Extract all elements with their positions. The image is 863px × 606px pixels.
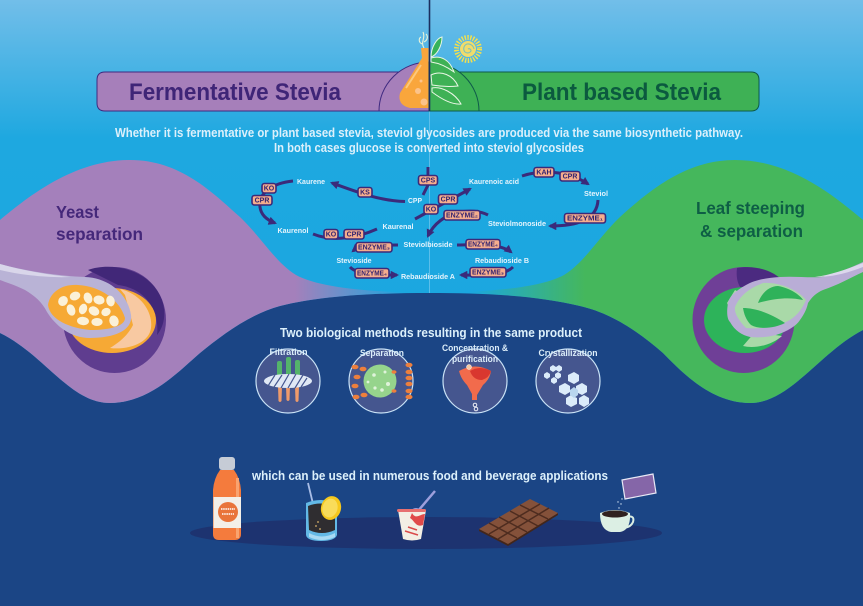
compound labels: CPP xyxy=(408,196,422,205)
intro text xyxy=(115,126,743,155)
intro text: In both cases glucose is converted into steviol glycosides xyxy=(274,141,584,155)
enzyme badges: ENZYME₃ xyxy=(358,244,390,252)
icon: yogurt xyxy=(397,491,435,540)
enzyme badges: ENZYME₄ xyxy=(468,242,498,248)
enzyme badges: KO xyxy=(426,206,437,214)
icon: separation: Separation xyxy=(360,348,404,359)
icon: leaf bowl and spoon xyxy=(692,262,863,373)
enzyme badges: KS xyxy=(360,190,370,196)
yeast cells xyxy=(56,290,120,328)
enzyme badges: CPR xyxy=(347,232,361,238)
icon: concentration funnel xyxy=(442,343,508,413)
intro text: Whether it is fermentative or plant based stevia, steviol glycosides are produced via the same biosynthetic pathway. xyxy=(115,126,743,140)
enzyme badges: ENZYME₂ xyxy=(446,212,478,220)
icon: flask xyxy=(399,32,428,108)
text: applications: which can be used in numerous food and beverage applications xyxy=(251,469,608,483)
icon: crystallization xyxy=(536,348,600,413)
compound labels: Kaurenal xyxy=(382,222,414,231)
compound labels: Steviolbioside xyxy=(404,240,452,249)
heading: two biological methods: Two biological methods resulting in the same product xyxy=(280,326,583,340)
icon: plant xyxy=(431,37,461,104)
enzyme badges: KAH xyxy=(536,170,552,176)
enzyme badges: CPR xyxy=(563,174,577,180)
enzyme badges: KO xyxy=(326,232,337,238)
enzyme badges: CPR xyxy=(441,196,455,204)
compound labels: Steviol xyxy=(584,189,608,198)
icon: crystallization: Crystallization xyxy=(538,348,598,359)
compound labels: Rebaudioside B xyxy=(475,256,530,265)
icon: sun xyxy=(456,38,480,60)
central emblem dome xyxy=(379,62,479,111)
icon: filtration: Filtration xyxy=(270,347,308,358)
heading: Yeast separation: separation xyxy=(56,224,143,244)
background: navy lower area xyxy=(0,293,863,606)
icon: concentration funnel: purification xyxy=(452,354,498,365)
enzyme badges: ENZYME₄ xyxy=(357,270,387,278)
icon: drink glass xyxy=(306,483,344,541)
enzyme badges: ENZYME₃ xyxy=(472,270,504,276)
leaves in spoon xyxy=(743,286,803,328)
icon: coffee cup and sachet xyxy=(600,474,656,532)
heading: Leaf steeping and separation: Leaf steeping xyxy=(696,198,805,218)
heading: Yeast separation: Yeast xyxy=(56,202,99,222)
icon: yeast bowl and spoon xyxy=(0,264,166,373)
enzyme badges: CPR xyxy=(255,198,269,204)
shadow ellipse xyxy=(190,517,662,549)
enzyme badges: CPS xyxy=(421,178,436,184)
enzyme badges: ENZYME₁ xyxy=(567,216,603,222)
pathway arrows xyxy=(260,167,598,275)
pathway diagram xyxy=(252,167,608,281)
icon: chocolate bar xyxy=(479,499,558,546)
compound labels: Kaurenoic acid xyxy=(469,177,519,186)
heading: Fermentative Stevia: Fermentative Stevia xyxy=(129,79,342,106)
heading: Yeast separation xyxy=(56,202,143,244)
compound labels: Steviolmonoside xyxy=(488,219,546,228)
compound labels: Kaurene xyxy=(297,177,325,186)
enzyme badges xyxy=(252,168,606,278)
icon: separation xyxy=(349,348,413,413)
header bar: Fermentative Stevia xyxy=(97,72,429,111)
panel: green plant based region xyxy=(430,160,863,403)
heading: Leaf steeping and separation: & separation xyxy=(700,221,803,241)
heading: Plant based Stevia: Plant based Stevia xyxy=(522,79,722,106)
icon: filtration xyxy=(256,347,320,413)
background: sky xyxy=(0,0,863,420)
compound labels: Kaurenol xyxy=(278,226,308,235)
icon: concentration funnel: Concentration & xyxy=(442,343,508,354)
icon: bottle xyxy=(213,457,241,540)
compound labels: Rebaudioside A xyxy=(401,272,456,281)
enzyme badges: KO xyxy=(264,186,275,192)
header bar: Plant based Stevia xyxy=(429,72,759,111)
heading: Leaf steeping and separation xyxy=(696,198,805,241)
compound labels xyxy=(278,177,608,281)
divider line xyxy=(428,111,430,293)
panel: purple fermentative region xyxy=(0,160,430,403)
center dark line xyxy=(428,0,430,111)
compound labels: Stevioside xyxy=(336,256,372,265)
